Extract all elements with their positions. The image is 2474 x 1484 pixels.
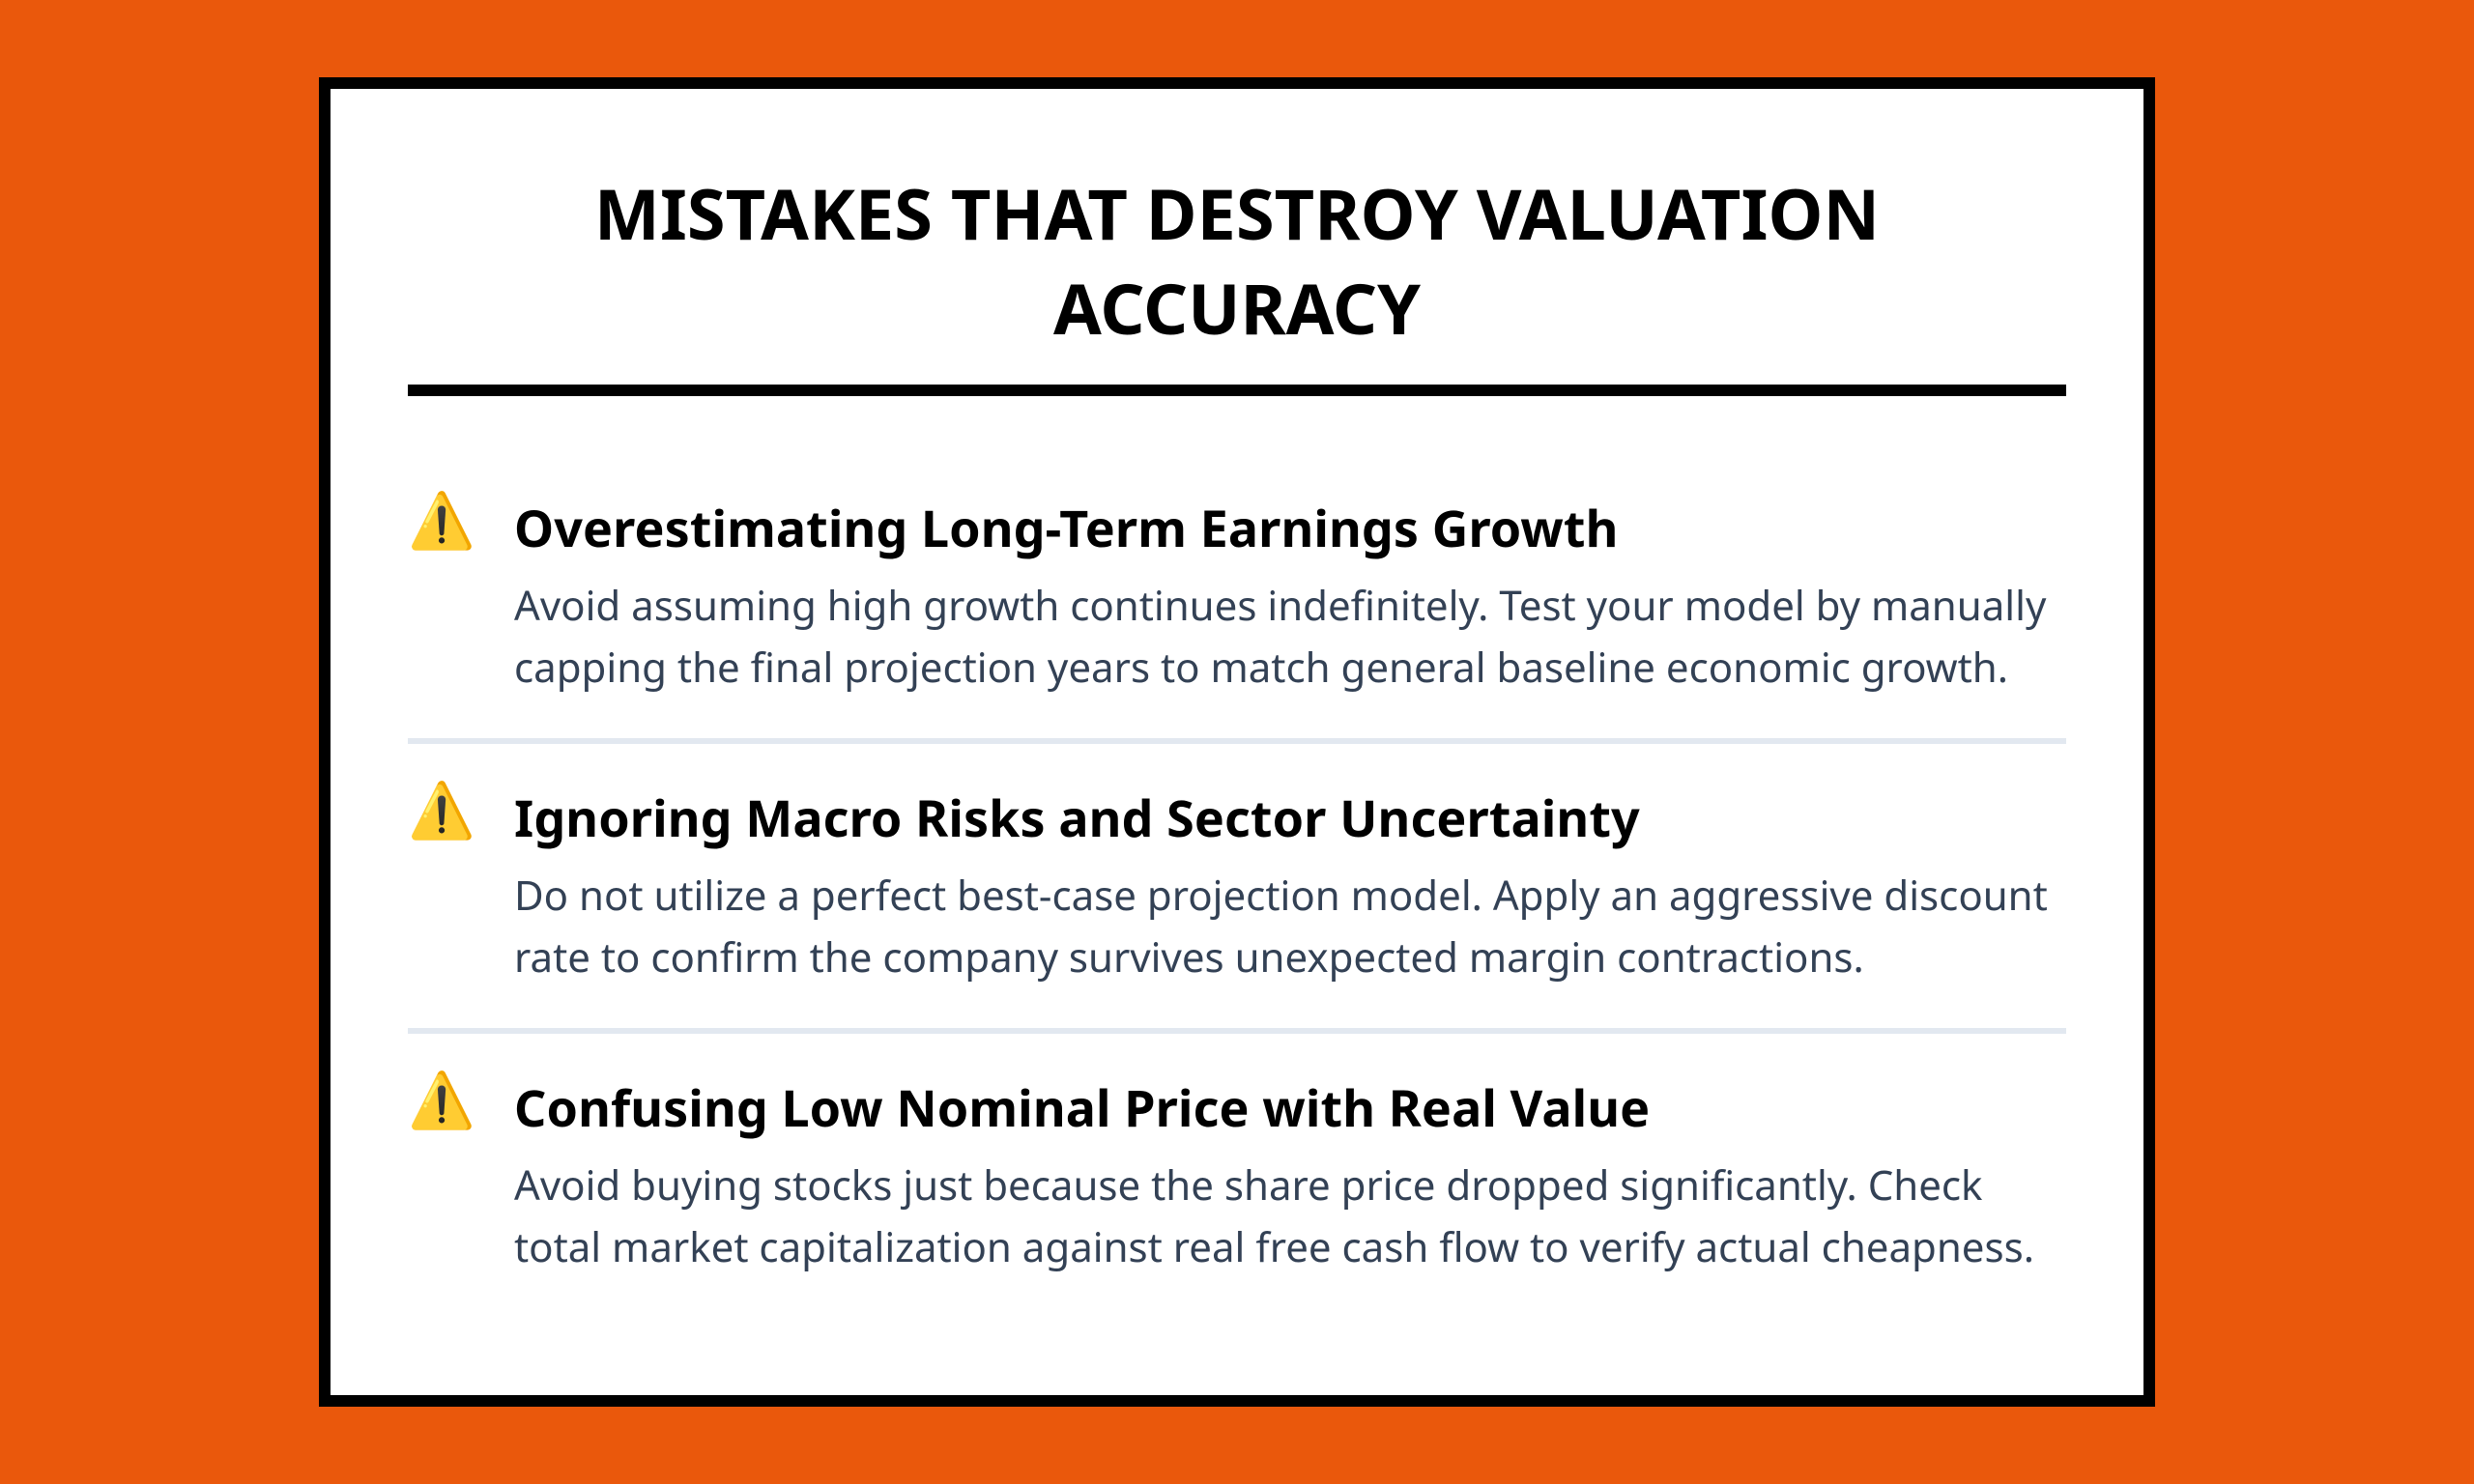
title: ACCURACY: [1053, 261, 1421, 356]
icon: warning triangle: ⚠️: [408, 779, 475, 842]
item: ignoring macro risks: [408, 779, 2048, 985]
description: [514, 578, 2047, 695]
heading: Overestimating Long-Term Earnings Growth: [514, 494, 1618, 562]
heading: Confusing Low Nominal Price with Real Value: [514, 1073, 1650, 1142]
description: [514, 1157, 2034, 1274]
description: total market capitalization against real free cash flow to verify actual cheapness.: [514, 1219, 2034, 1274]
title: [594, 166, 1880, 356]
icon: warning triangle: ⚠️: [408, 489, 475, 553]
item: overestimating growth: [408, 489, 2047, 695]
title: MISTAKES THAT DESTROY VALUATION: [594, 166, 1880, 261]
description: Avoid assuming high growth continues indefinitely. Test your model by manually: [514, 578, 2046, 633]
heading: Ignoring Macro Risks and Sector Uncertainty: [514, 784, 1640, 852]
description: Avoid buying stocks just because the share price dropped significantly. Check: [514, 1157, 1982, 1213]
panel: white card with black border: [319, 77, 2155, 1407]
description: Do not utilize a perfect best-case projection model. Apply an aggressive discount: [514, 868, 2048, 923]
description: rate to confirm the company survives unexpected margin contractions.: [514, 929, 1864, 985]
item: confusing low nominal price: [408, 1069, 2034, 1274]
description: [514, 868, 2048, 985]
icon: warning triangle: ⚠️: [408, 1069, 475, 1132]
description: capping the final projection years to match general baseline economic growth.: [514, 640, 2008, 695]
